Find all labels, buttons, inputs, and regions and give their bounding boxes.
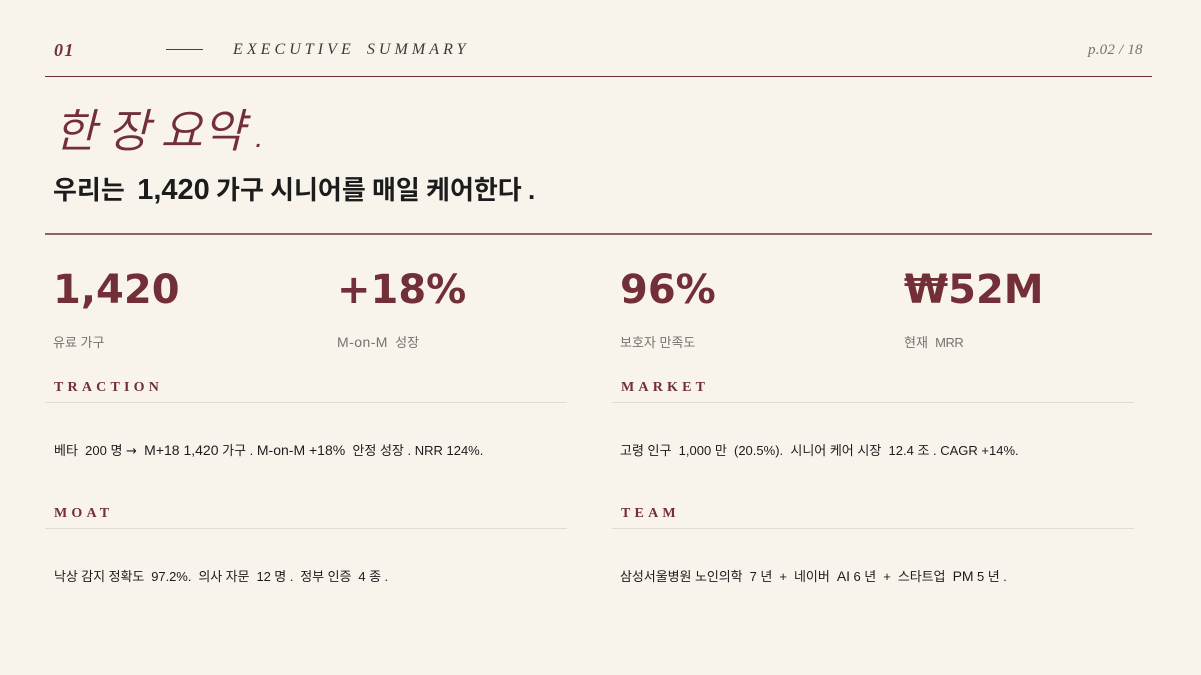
header rule [45, 76, 1152, 77]
team rule [612, 528, 1134, 529]
KPI value: 96% [620, 267, 716, 313]
panel: traction [45, 380, 567, 459]
market heading: MARKET [621, 380, 709, 395]
KPI value: 1,420 [53, 267, 180, 313]
market rule [612, 402, 1134, 403]
KPI label: 보호자 만족도 [620, 335, 695, 350]
team heading: TEAM [621, 506, 680, 521]
panel: market [612, 380, 1134, 458]
moat rule [45, 528, 567, 529]
heading rule [45, 233, 1152, 235]
KPI: MRR [904, 267, 1044, 350]
team text: 삼성서울병원 노인의학 7 년 + 네이버 AI 6 년 + 스타트업 PM 5 년 . [620, 568, 1007, 584]
traction text: 베타 200 명 → M+18 1,420 가구 . M-on-M +18% 안정 성장 . NRR 124%. [54, 442, 483, 459]
panel: team [612, 506, 1134, 584]
KPI label: 현재 MRR [904, 335, 963, 350]
KPI: growth [337, 267, 466, 350]
subheading: 우리는 1,420 가구 시니어를 매일 케어한다 . [53, 174, 535, 206]
KPI label: M-on-M 성장 [337, 334, 419, 350]
header dash [166, 49, 203, 50]
traction heading: TRACTION [54, 380, 163, 395]
traction rule [45, 402, 567, 403]
KPI value: +18% [337, 267, 466, 313]
KPI value: ₩52M [904, 267, 1044, 313]
section number: 01 [54, 40, 75, 60]
market text: 고령 인구 1,000 만 (20.5%). 시니어 케어 시장 12.4 조 . CAGR +14%. [620, 443, 1019, 458]
moat text: 낙상 감지 정확도 97.2%. 의사 자문 12 명 . 정부 인증 4 종 . [54, 569, 388, 584]
KPI label: 유료 가구 [53, 335, 104, 350]
moat heading: MOAT [54, 506, 113, 521]
KPI: paid households [53, 267, 180, 350]
main heading: 한 장 요약 . [54, 105, 264, 157]
panel: moat [45, 506, 567, 584]
page number: p.02 / 18 [1088, 42, 1143, 58]
section title: EXECUTIVE SUMMARY [233, 41, 470, 58]
KPI: satisfaction [620, 267, 716, 350]
